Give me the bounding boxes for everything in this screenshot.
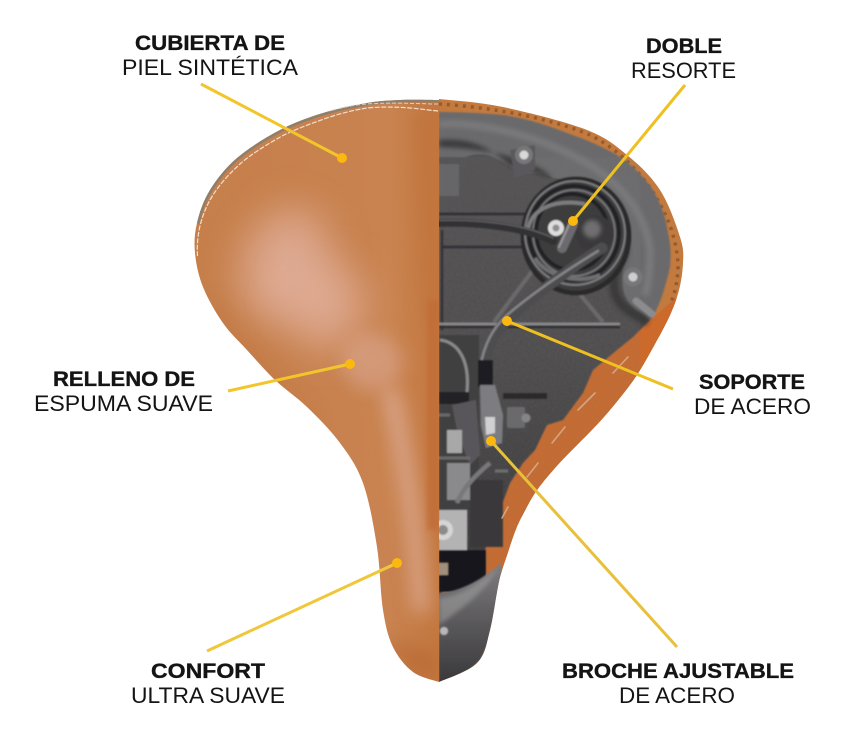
label: soporte de acero: SOPORTE <box>699 371 805 394</box>
inner plate <box>439 154 650 595</box>
saddle right half: underside <box>433 95 695 685</box>
label: doble resorte <box>631 35 736 83</box>
label: confort ultra suave: ULTRA SUAVE <box>131 683 285 708</box>
line: broche <box>486 436 677 647</box>
panel: saddle illustration <box>190 95 695 685</box>
steel support arm <box>480 248 602 368</box>
stitching on orange lining <box>502 357 628 518</box>
metal shell rim <box>439 111 672 320</box>
saddle left half: leather cover <box>190 95 440 685</box>
label: relleno de espuma suave: ESPUMA SUAVE <box>34 391 213 416</box>
label: doble resorte: RESORTE <box>631 58 736 83</box>
callout lines <box>201 84 685 651</box>
label: broche ajustable de acero: DE ACERO <box>619 683 735 708</box>
line: relleno <box>228 359 355 391</box>
label: confort ultra suave: CONFORT <box>151 660 265 683</box>
plate texture <box>439 157 640 595</box>
lower frame background <box>439 335 479 491</box>
label: cubierta de piel sintetica <box>122 32 298 80</box>
label: soporte de acero: DE ACERO <box>694 394 811 419</box>
line: doble resorte <box>568 85 685 226</box>
line: confort <box>207 558 402 651</box>
shell shadow <box>439 139 553 178</box>
metal nose <box>439 563 502 683</box>
stitches upper row <box>330 103 438 111</box>
embossed panel <box>439 164 459 196</box>
spring coils <box>523 179 629 293</box>
label: broche ajustable de acero <box>562 660 794 708</box>
label: broche ajustable de acero: BROCHE AJUSTABLE <box>562 660 794 683</box>
wire into spring <box>439 220 573 248</box>
line: cubierta <box>201 84 347 163</box>
torn orange lining <box>486 298 677 594</box>
metal bolts on shell <box>510 145 652 314</box>
spring bolt and nut <box>546 218 610 246</box>
seam edge <box>197 100 439 223</box>
label: cubierta de piel sintetica: CUBIERTA DE <box>135 32 285 55</box>
label: confort ultra suave <box>131 660 285 708</box>
label: relleno de espuma suave: RELLENO DE <box>53 368 195 391</box>
clamp assembly <box>439 340 547 547</box>
label: doble resorte: DOBLE <box>646 35 722 58</box>
silver bracket plate <box>433 510 486 592</box>
line: soporte <box>502 316 673 389</box>
stitches <box>197 107 438 256</box>
label: relleno de espuma suave <box>34 368 213 416</box>
leather rim <box>438 95 688 685</box>
label: cubierta de piel sintetica: PIEL SINTÉTICA <box>122 55 298 80</box>
frame wires <box>439 214 620 330</box>
label: soporte de acero <box>694 371 811 419</box>
